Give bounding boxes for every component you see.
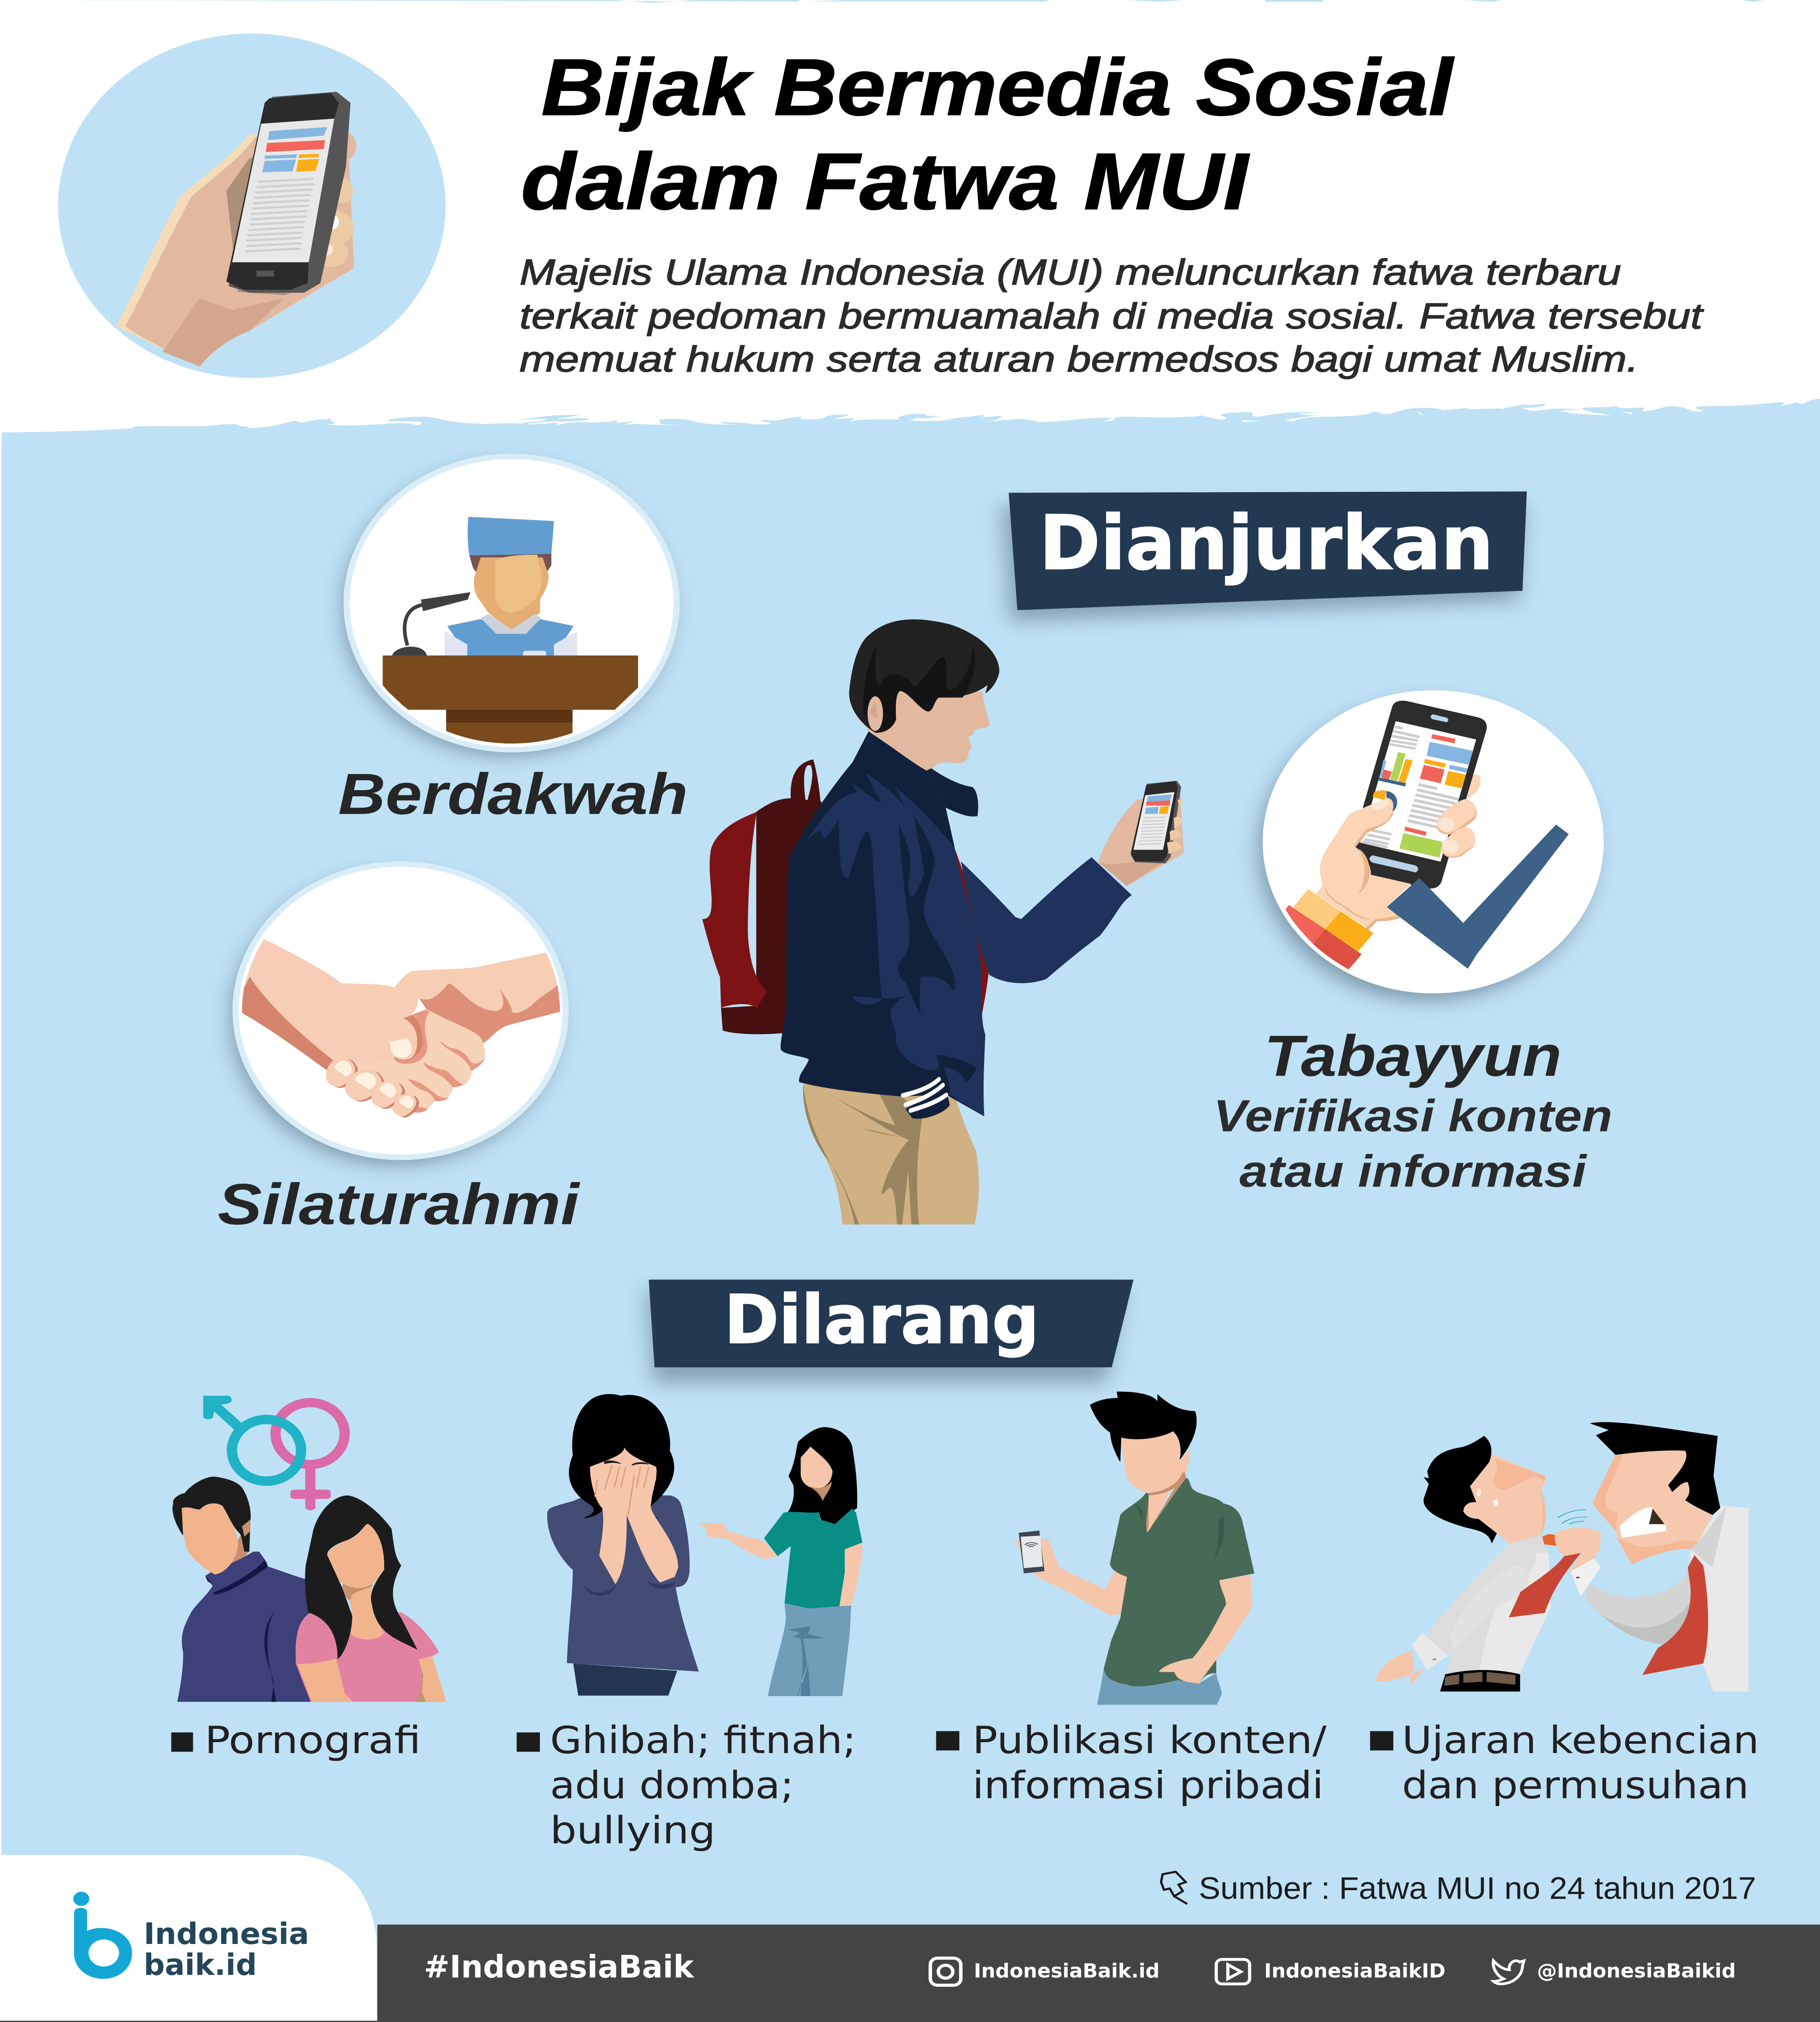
text block: Tabayyun: Verifikasi konten	[1213, 1091, 1613, 1141]
list item: Ghibah	[517, 1719, 856, 1853]
text block: introduction	[520, 252, 1704, 379]
figure: couple with gender symbols	[172, 1396, 447, 1702]
title: Bijak Bermedia Sosial	[542, 42, 1455, 132]
title	[521, 42, 1455, 226]
figure: young man with backpack looking at phone	[702, 620, 1184, 1225]
banner: Dilarang	[646, 1280, 1134, 1383]
footer bar	[0, 1925, 1820, 2022]
text block: Tabayyun	[1213, 1024, 1613, 1197]
list item: Publikasi: informasi pribadi	[972, 1764, 1324, 1807]
icon: preacher at lectern circle	[343, 457, 677, 756]
figure: man with phone showing private content	[1014, 1392, 1255, 1705]
icon: handshake circle	[231, 864, 565, 1165]
icon: twitter	[1493, 1961, 1524, 1984]
banner: Dilarang: Dilarang	[724, 1280, 1039, 1359]
icon: hand holding phone in circle	[58, 34, 446, 378]
figure: bullied woman and pointing woman	[547, 1394, 862, 1696]
label: instagram handle: IndonesiaBaik.id	[974, 1960, 1160, 1982]
logo panel: Indonesia Baik	[0, 1855, 377, 2021]
label: twitter handle: @IndonesiaBaikid	[1537, 1960, 1736, 1982]
text block: introduction: Majelis Ulama Indonesia (MUI) meluncurkan fatwa terbaru	[520, 252, 1621, 292]
label: Silaturahmi: Silaturahmi	[218, 1172, 581, 1237]
logo wordmark: Indonesia	[144, 1917, 309, 1951]
list item: Ujaran: dan permusuhan	[1402, 1764, 1749, 1807]
label: Berdakwah: Berdakwah	[338, 762, 688, 827]
text block: introduction: terkait pedoman bermuamalah di media sosial. Fatwa tersebut	[520, 296, 1704, 336]
logo wordmark	[144, 1917, 309, 1982]
icon: phone with checkmark circle	[1258, 690, 1604, 1001]
list item: Ghibah: Ghibah; fitnah;	[550, 1719, 856, 1762]
figure: two men fighting	[1376, 1422, 1749, 1692]
text block: introduction: memuat hukum serta aturan bermedsos bagi umat Muslim.	[520, 339, 1638, 379]
footer bar: #IndonesiaBaik	[424, 1949, 694, 1985]
list item: Publikasi	[936, 1719, 1327, 1807]
logo wordmark: baik.id	[144, 1948, 257, 1982]
text block: Tabayyun: atau informasi	[1240, 1146, 1587, 1197]
list item: Pornografi: Pornografi	[205, 1719, 421, 1762]
icon: youtube	[1216, 1959, 1250, 1984]
text block: Tabayyun: Tabayyun	[1264, 1024, 1562, 1088]
label: youtube handle: IndonesiaBaikID	[1264, 1960, 1445, 1982]
banner: Dianjurkan: Dianjurkan	[1039, 500, 1494, 587]
list item: Ghibah: bullying	[550, 1809, 715, 1853]
list item: Ujaran	[1370, 1719, 1759, 1807]
icon: logo mark	[73, 1892, 132, 1979]
banner: Dianjurkan	[1001, 491, 1527, 622]
list item: Publikasi: Publikasi konten/	[972, 1719, 1327, 1762]
title: dalam Fatwa MUI	[521, 136, 1250, 226]
list item: Ujaran: Ujaran kebencian	[1402, 1719, 1759, 1762]
icon: instagram	[930, 1958, 961, 1985]
source note with pin icon: Sumber : Fatwa MUI no 24 tahun 2017	[1199, 1871, 1756, 1906]
list item: Ghibah: adu domba;	[550, 1764, 794, 1807]
